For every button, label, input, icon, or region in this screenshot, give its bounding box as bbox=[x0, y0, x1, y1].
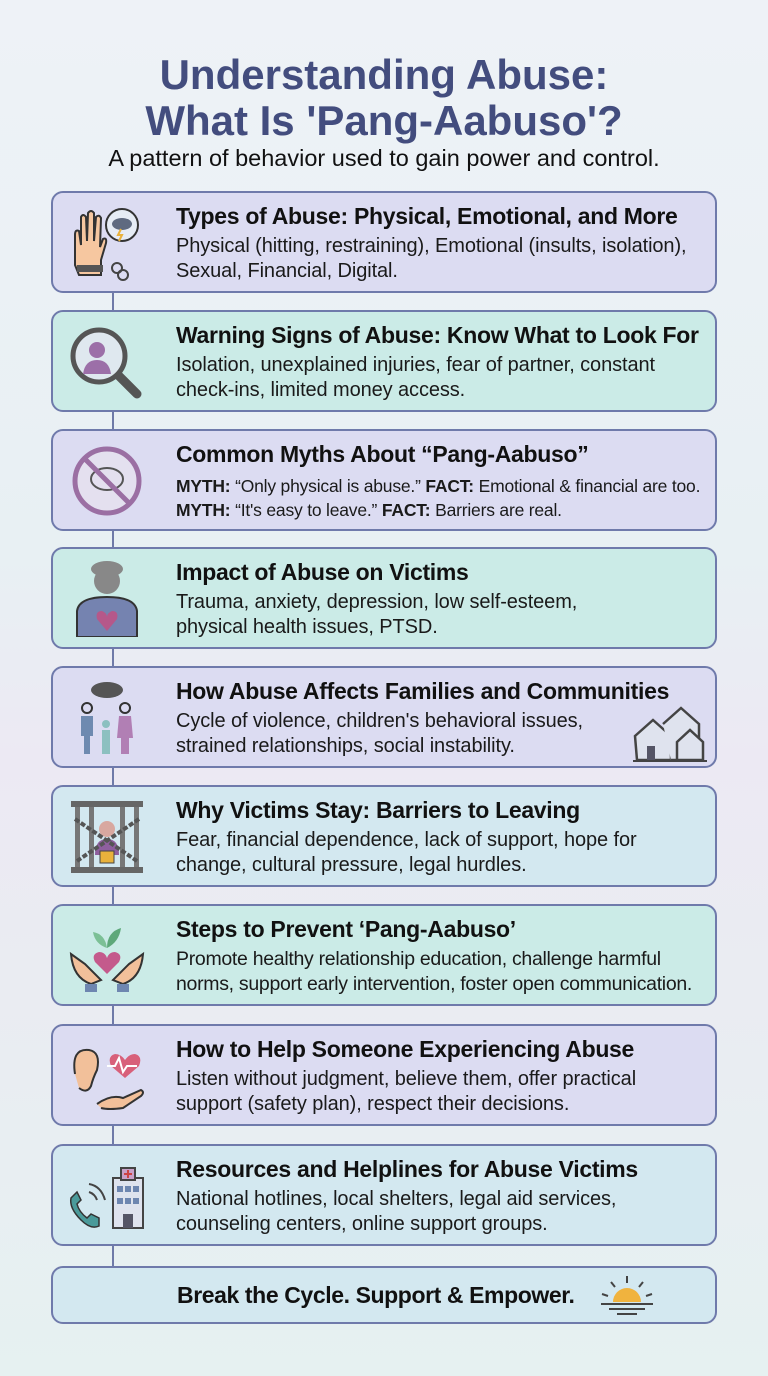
text: National hotlines, local shelters, legal aid services, bbox=[176, 1188, 616, 1210]
text: Fear, financial dependence, lack of support, hope for bbox=[176, 829, 637, 851]
text bbox=[176, 354, 655, 401]
text: Sexual, Financial, Digital. bbox=[176, 260, 398, 282]
panel: how to help bbox=[51, 1024, 717, 1126]
heading: Common Myths About “Pang-Aabuso” bbox=[176, 441, 588, 467]
icon: no-myth sign bbox=[72, 446, 142, 516]
icon: person with cloud and heart bbox=[76, 561, 138, 637]
text: physical health issues, PTSD. bbox=[176, 616, 438, 638]
panel: resources bbox=[51, 1144, 717, 1246]
title: What Is 'Pang-Aabuso'? bbox=[145, 97, 623, 144]
icon: jail with chains bbox=[71, 801, 143, 873]
icon: hands with heart and sprout bbox=[70, 928, 144, 992]
heading: How to Help Someone Experiencing Abuse bbox=[176, 1036, 634, 1062]
panel: closing banner bbox=[51, 1266, 717, 1324]
text: counseling centers, online support groups. bbox=[176, 1213, 548, 1235]
icon: magnifier bbox=[70, 328, 142, 398]
subtitle: A pattern of behavior used to gain power and control. bbox=[108, 145, 660, 171]
text: MYTH: “Only physical is abuse.” FACT: Emotional & financial are too. bbox=[176, 476, 700, 496]
closing text: Break the Cycle. Support & Empower. bbox=[177, 1282, 575, 1308]
text: norms, support early intervention, foster open communication. bbox=[176, 973, 692, 995]
text: change, cultural pressure, legal hurdles. bbox=[176, 854, 527, 876]
text bbox=[176, 1188, 616, 1235]
text: support (safety plan), respect their decisions. bbox=[176, 1093, 569, 1115]
icon: houses bbox=[633, 706, 707, 762]
text: Cycle of violence, children's behavioral issues, bbox=[176, 710, 583, 732]
text bbox=[176, 476, 700, 520]
title: Understanding Abuse: bbox=[160, 51, 608, 98]
text: Listen without judgment, believe them, offer practical bbox=[176, 1068, 636, 1090]
panel: prevention bbox=[51, 904, 717, 1006]
text bbox=[176, 1068, 636, 1115]
heading: Impact of Abuse on Victims bbox=[176, 559, 469, 585]
icon: ear, heart, hand bbox=[73, 1048, 144, 1110]
panel: why victims stay bbox=[51, 785, 717, 887]
heading: Steps to Prevent ‘Pang-Aabuso’ bbox=[176, 916, 516, 942]
text bbox=[176, 710, 583, 757]
icon: phone and hospital bbox=[70, 1167, 144, 1229]
text: Physical (hitting, restraining), Emotional (insults, isolation), bbox=[176, 235, 686, 257]
heading: Why Victims Stay: Barriers to Leaving bbox=[176, 797, 580, 823]
text: Promote healthy relationship education, challenge harmful bbox=[176, 948, 661, 970]
panel: types of abuse bbox=[51, 191, 717, 293]
text bbox=[176, 235, 686, 282]
text: Isolation, unexplained injuries, fear of partner, constant bbox=[176, 354, 655, 376]
panel: myths bbox=[51, 429, 717, 531]
heading: Types of Abuse: Physical, Emotional, and More bbox=[176, 203, 678, 229]
icon: hand and storm bbox=[74, 208, 139, 281]
icon: sunrise bbox=[601, 1276, 653, 1315]
panel: impact bbox=[51, 547, 717, 649]
text: MYTH: “It's easy to leave.” FACT: Barriers are real. bbox=[176, 500, 562, 520]
panel: warning signs bbox=[51, 310, 717, 412]
icon: family under cloud bbox=[81, 682, 133, 754]
heading: Warning Signs of Abuse: Know What to Look For bbox=[176, 322, 699, 348]
heading: Resources and Helplines for Abuse Victims bbox=[176, 1156, 638, 1182]
title bbox=[145, 51, 623, 144]
text bbox=[176, 829, 637, 876]
text bbox=[176, 948, 692, 995]
heading: How Abuse Affects Families and Communities bbox=[176, 678, 669, 704]
text: Trauma, anxiety, depression, low self-esteem, bbox=[176, 591, 577, 613]
text: check-ins, limited money access. bbox=[176, 379, 465, 401]
text: strained relationships, social instability. bbox=[176, 735, 515, 757]
panel: families bbox=[51, 666, 717, 768]
text bbox=[176, 591, 577, 638]
